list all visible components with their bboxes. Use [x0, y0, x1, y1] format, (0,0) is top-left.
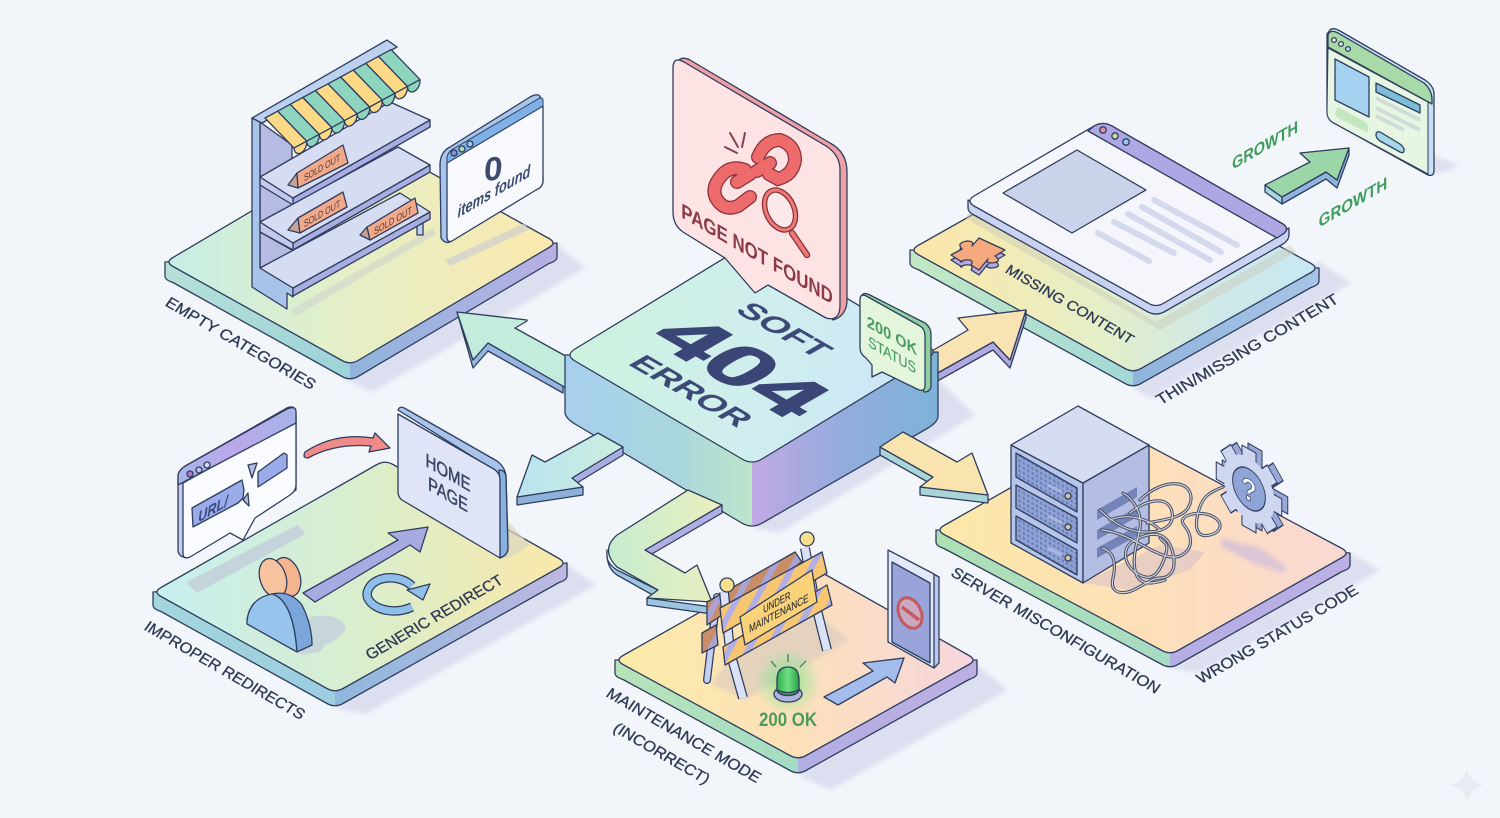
- barricade: [702, 532, 832, 698]
- sign text under: UNDER: [763, 590, 791, 616]
- label: soft: SOFT: [728, 298, 840, 363]
- label: maintenance mode: MAINTENANCE MODE: [603, 685, 765, 786]
- sparkle watermark: [1450, 768, 1484, 802]
- broken url bar: URL/: [198, 492, 229, 527]
- zero items window: items found: [458, 161, 531, 222]
- arrow to door: [824, 658, 904, 705]
- thin content browser window: [968, 124, 1289, 314]
- label: server misconfiguration: SERVER MISCONFIGURATION: [948, 564, 1164, 697]
- home page wall: PAGE: [428, 473, 468, 518]
- sold out tag 2: SOLD OUT: [304, 198, 340, 231]
- broken url speech window: [178, 407, 296, 558]
- central platform: soft 404 error: [565, 245, 938, 526]
- person icon: [247, 554, 345, 655]
- label: page not found: PAGE NOT FOUND: [681, 199, 833, 310]
- icon: puzzle piece: [951, 238, 1005, 275]
- arrow: to thin content: [925, 310, 1026, 388]
- panel shadows: [335, 245, 1380, 790]
- panel: improper redirects: [141, 407, 567, 723]
- status text line 2: STATUS: [868, 333, 916, 378]
- label: wrong status code: WRONG STATUS CODE: [1193, 582, 1362, 687]
- sold out tag 3: [360, 198, 418, 240]
- sign text maintenance: MAINTENANCE: [749, 592, 809, 636]
- icon: broken chain link: [714, 133, 795, 208]
- label: generic redirect: GENERIC REDIRECT: [362, 572, 507, 663]
- healthy browser window: [1327, 29, 1460, 175]
- label: thin missing content: THIN/MISSING CONTENT: [1153, 291, 1342, 408]
- purple redirect arrow: [303, 527, 428, 602]
- panel: maintenance mode: [603, 550, 977, 788]
- label: growth lower: GROWTH: [1319, 173, 1387, 232]
- page not found speech bubble: [673, 58, 847, 320]
- home page wall: [398, 407, 530, 558]
- label: 404: 404: [632, 304, 849, 429]
- label: missing content: MISSING CONTENT: [1002, 262, 1137, 348]
- panel: server misconfiguration: [936, 406, 1362, 697]
- 200 ok status bubble: [860, 294, 931, 392]
- sold out tag 2: [288, 192, 347, 233]
- sold out tag 3: SOLD OUT: [374, 205, 412, 238]
- label: empty categories: EMPTY CATEGORIES: [162, 294, 319, 393]
- tangled cables: [1100, 484, 1223, 593]
- label: 200 OK beacon status: 200 OK: [759, 710, 817, 731]
- label: improper redirects: IMPROPER REDIRECTS: [141, 618, 309, 723]
- panel: thin missing content: [910, 124, 1342, 408]
- icon: gear with question mark: [1216, 429, 1288, 547]
- server rack: [1011, 406, 1149, 583]
- circular redirect icon: [367, 578, 430, 611]
- zero items window: 0: [482, 149, 504, 188]
- label: incorrect: (INCORRECT): [610, 719, 714, 788]
- growth arrow: [1265, 148, 1349, 204]
- arrow: to maintenance: [607, 490, 722, 614]
- door with no entry sign: [888, 550, 939, 668]
- icon: striped awning: [265, 50, 420, 154]
- panel: empty categories: [162, 40, 557, 393]
- arrow: to server: [880, 432, 988, 503]
- broken url bar: [192, 453, 287, 527]
- icon: magnifier: [758, 185, 807, 255]
- arrow: to improper redirects: [517, 433, 623, 505]
- sold out tag 1: SOLD OUT: [304, 152, 340, 185]
- green beacon: [754, 648, 822, 716]
- barricade legs: [724, 548, 827, 698]
- zero items window: [440, 95, 543, 242]
- icon: gear with question mark: ?: [1241, 469, 1257, 512]
- red redirect arrow: [304, 433, 390, 458]
- home page wall: HOME: [425, 450, 471, 497]
- label: growth upper: GROWTH: [1232, 117, 1298, 174]
- status text line 1: 200 OK: [867, 313, 918, 360]
- label: error: ERROR: [621, 351, 761, 432]
- arrow: to empty categories: [457, 312, 580, 396]
- sold out tag 1: [288, 145, 348, 188]
- icon: empty shelf: [252, 40, 430, 309]
